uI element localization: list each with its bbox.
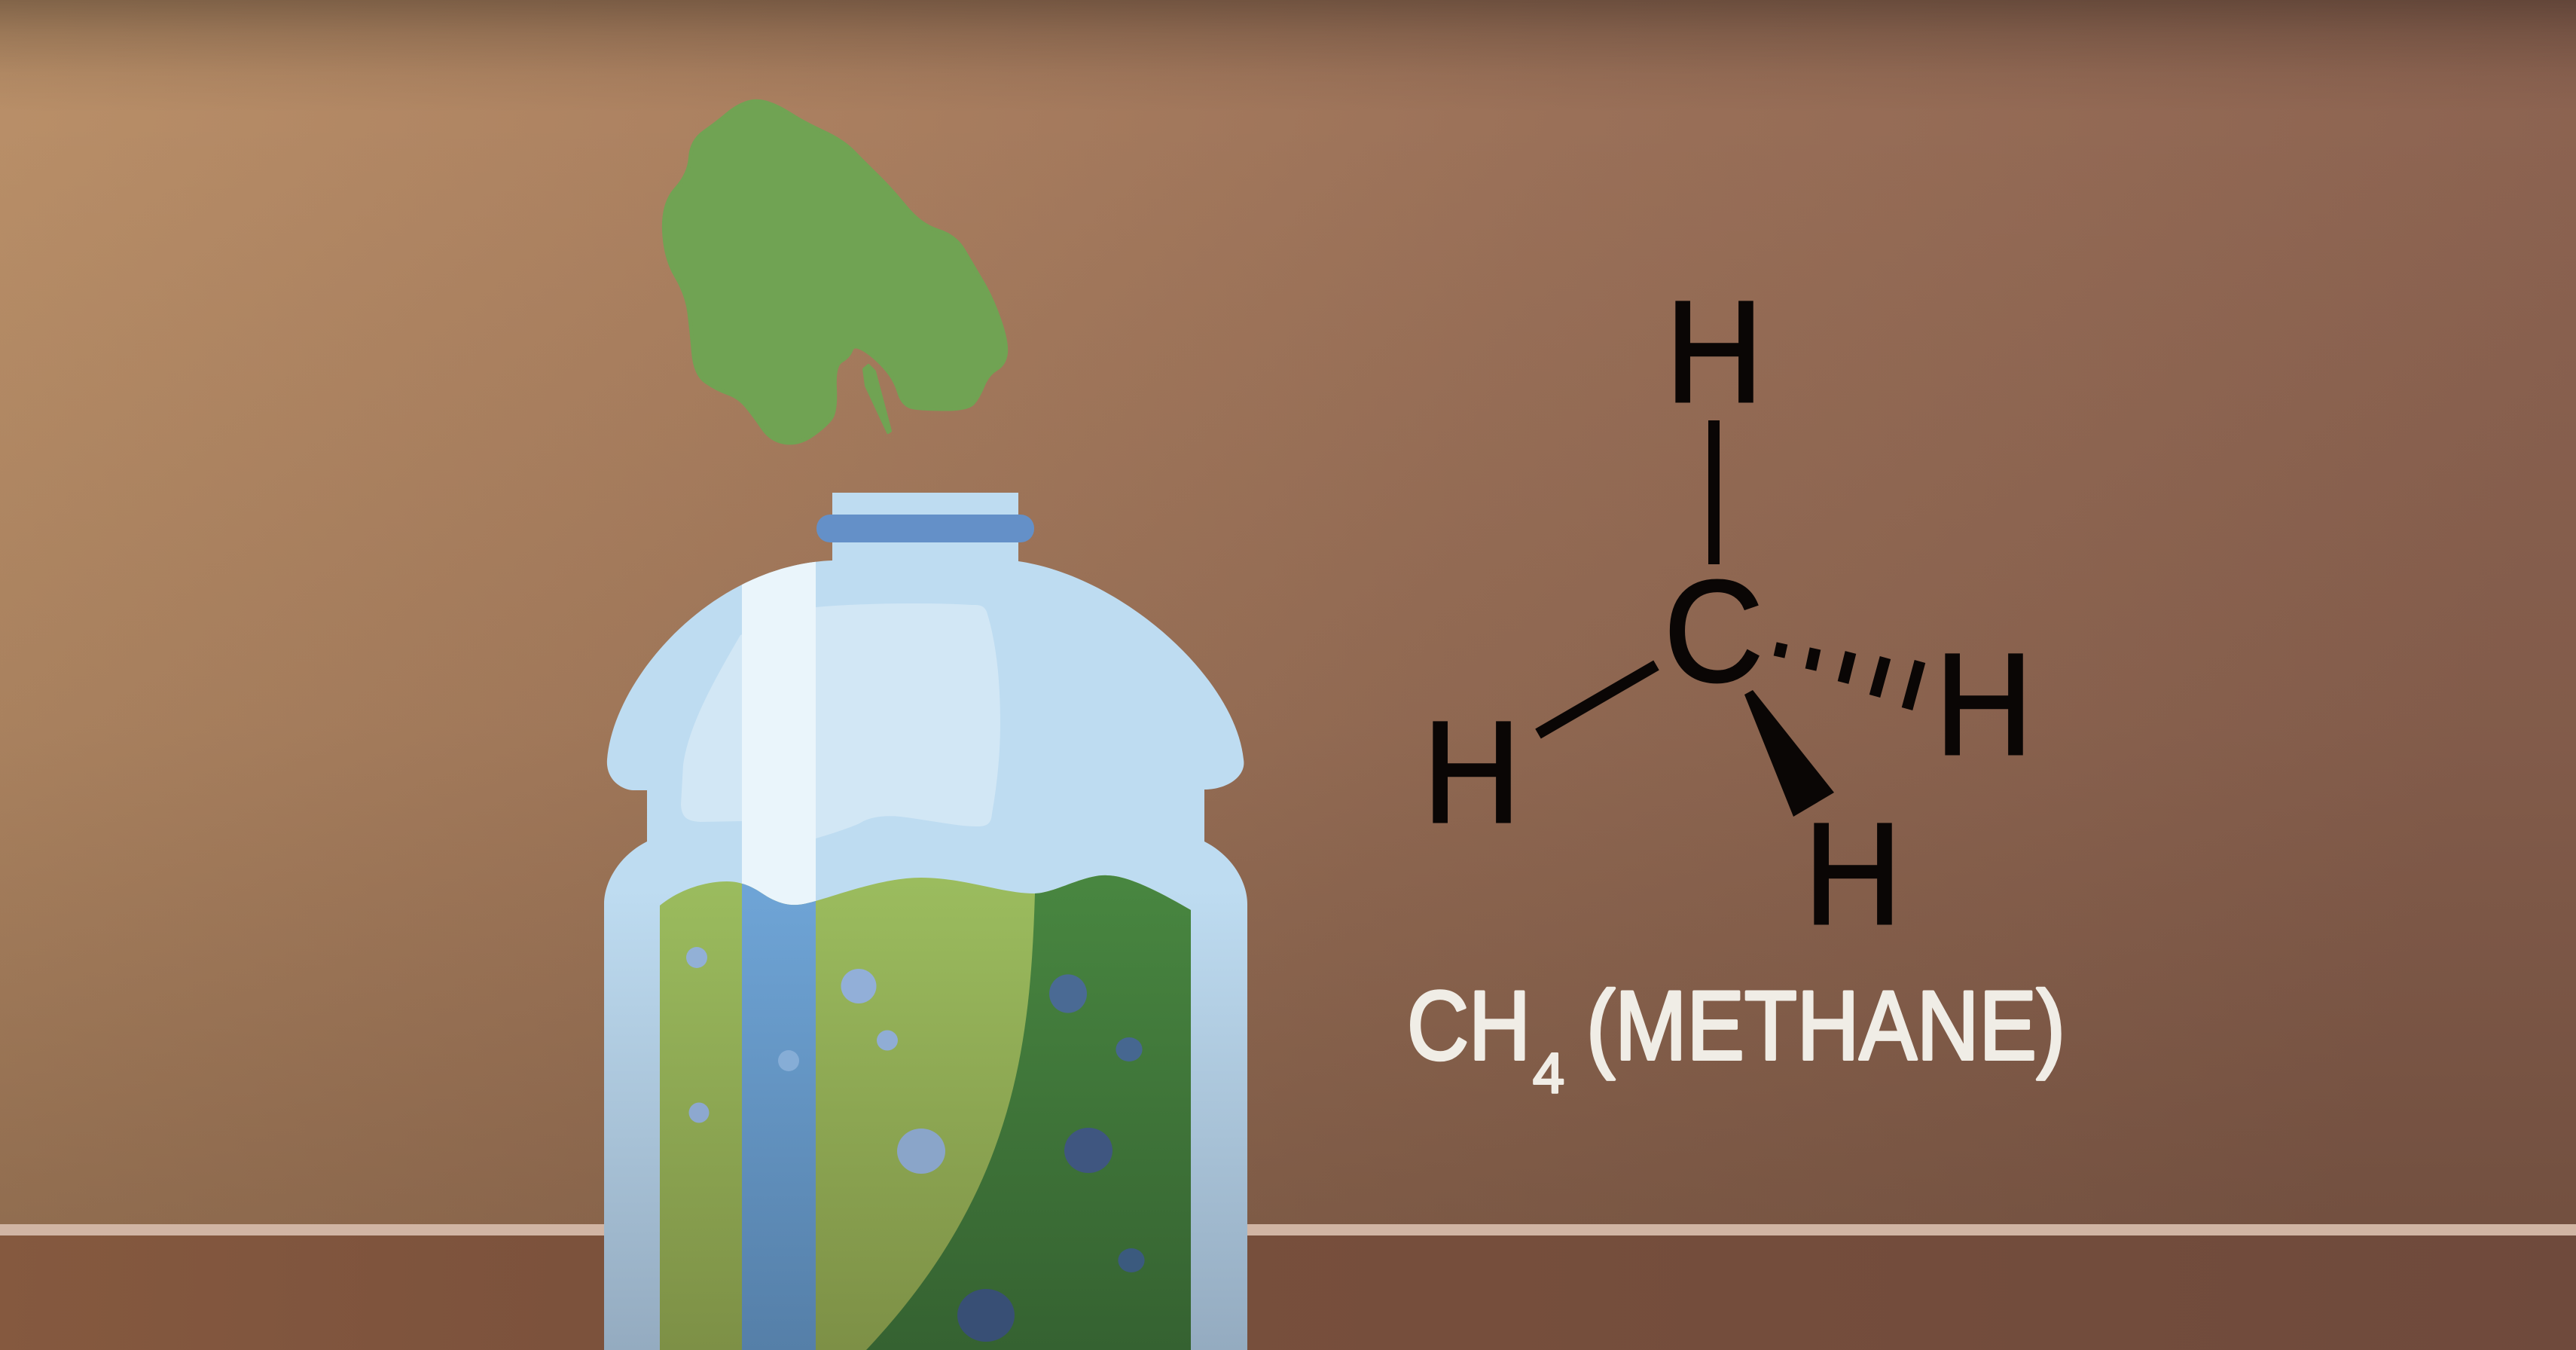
label: CH4 (METHANE): CH xyxy=(1407,970,1531,1080)
green methane gas cloud xyxy=(664,101,1006,443)
methane structural formula xyxy=(1423,270,2033,954)
white reflection strip xyxy=(742,562,816,905)
bottle glass body xyxy=(604,493,1247,1350)
bond: solid wedge xyxy=(1744,690,1834,817)
bond: top single xyxy=(1708,420,1720,564)
bond: hashed wedge xyxy=(1779,643,1920,709)
water bottle xyxy=(604,493,1247,1350)
neck ring xyxy=(816,515,1034,542)
algae liquid xyxy=(660,866,1205,1350)
light bubbles xyxy=(686,947,945,1174)
bond: left single xyxy=(1538,665,1656,734)
dark green algae region xyxy=(866,866,1205,1350)
bottle highlight xyxy=(681,603,1000,838)
floor line xyxy=(0,1224,2576,1235)
atom: left hydrogen: H xyxy=(1423,691,1521,853)
label: CH4 (METHANE): (METHANE) xyxy=(1586,970,2065,1080)
atom: bottom hydrogen: H xyxy=(1804,793,1902,954)
dark bubbles xyxy=(957,974,1145,1342)
atom: right hydrogen: H xyxy=(1935,623,2033,785)
atom: top hydrogen: H xyxy=(1665,270,1763,432)
blue water band xyxy=(742,866,816,1350)
label: CH4 (METHANE) xyxy=(1407,970,2065,1104)
atom: carbon: C xyxy=(1664,550,1763,712)
label: CH4 (METHANE): 4 xyxy=(1533,1041,1564,1104)
